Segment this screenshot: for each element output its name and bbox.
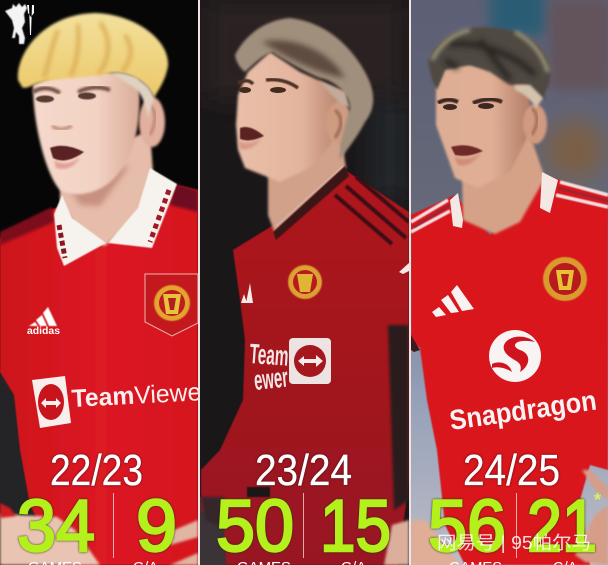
goal contributions 21: 21 bbox=[527, 486, 597, 565]
crest 24/25 bbox=[543, 257, 587, 301]
sponsor TeamViewer 22/23: TeamViewer bbox=[71, 378, 210, 413]
sponsor TeamViewer 23/24: Team bbox=[249, 338, 290, 372]
adidas logo 22/23 bbox=[27, 307, 60, 337]
hands 24/25 bbox=[411, 520, 460, 565]
panel: season 23/24 bbox=[200, 0, 410, 565]
season label 22/23: 22/23 bbox=[50, 446, 143, 495]
goal contributions 9: 9 bbox=[136, 486, 177, 565]
goal contributions 15: 15 bbox=[320, 486, 391, 565]
panel: season 24/25 bbox=[411, 0, 608, 565]
season label 24/25: 24/25 bbox=[463, 446, 560, 495]
crest 22/23 bbox=[145, 274, 198, 336]
sponsor TeamViewer 23/24 bbox=[250, 338, 331, 390]
player portrait 24/25 bbox=[411, 27, 608, 565]
panel: season 22/23 bbox=[0, 0, 210, 565]
divider 22/23 bbox=[113, 493, 114, 558]
adidas logo 24/25 bbox=[432, 285, 474, 317]
club crest bbox=[5, 3, 34, 44]
hands 22/23 bbox=[0, 514, 100, 565]
watermark: 网易号 | 95帕尔马 bbox=[437, 533, 591, 553]
sponsor TeamViewer 22/23 bbox=[32, 376, 210, 428]
games count 56: 56 bbox=[428, 486, 506, 565]
season label 23/24: 23/24 bbox=[255, 446, 352, 495]
player portrait 22/23 bbox=[0, 13, 210, 565]
sponsor TeamViewer 23/24: ewer bbox=[252, 362, 289, 396]
adidas logo 23/24 bbox=[241, 283, 253, 303]
divider 24/25 bbox=[516, 493, 517, 558]
games count 50: 50 bbox=[216, 486, 294, 565]
adidas logo 22/23: adidas bbox=[27, 326, 60, 337]
asterisk: * bbox=[594, 490, 601, 510]
collar bbox=[54, 195, 106, 266]
games count 34: 34 bbox=[17, 486, 95, 565]
divider 23/24 bbox=[303, 493, 304, 558]
crest 23/24 bbox=[288, 265, 322, 299]
hand 23/24 bbox=[384, 520, 409, 565]
sponsor Snapdragon bbox=[448, 330, 598, 436]
player portrait 23/24 bbox=[201, 18, 409, 565]
